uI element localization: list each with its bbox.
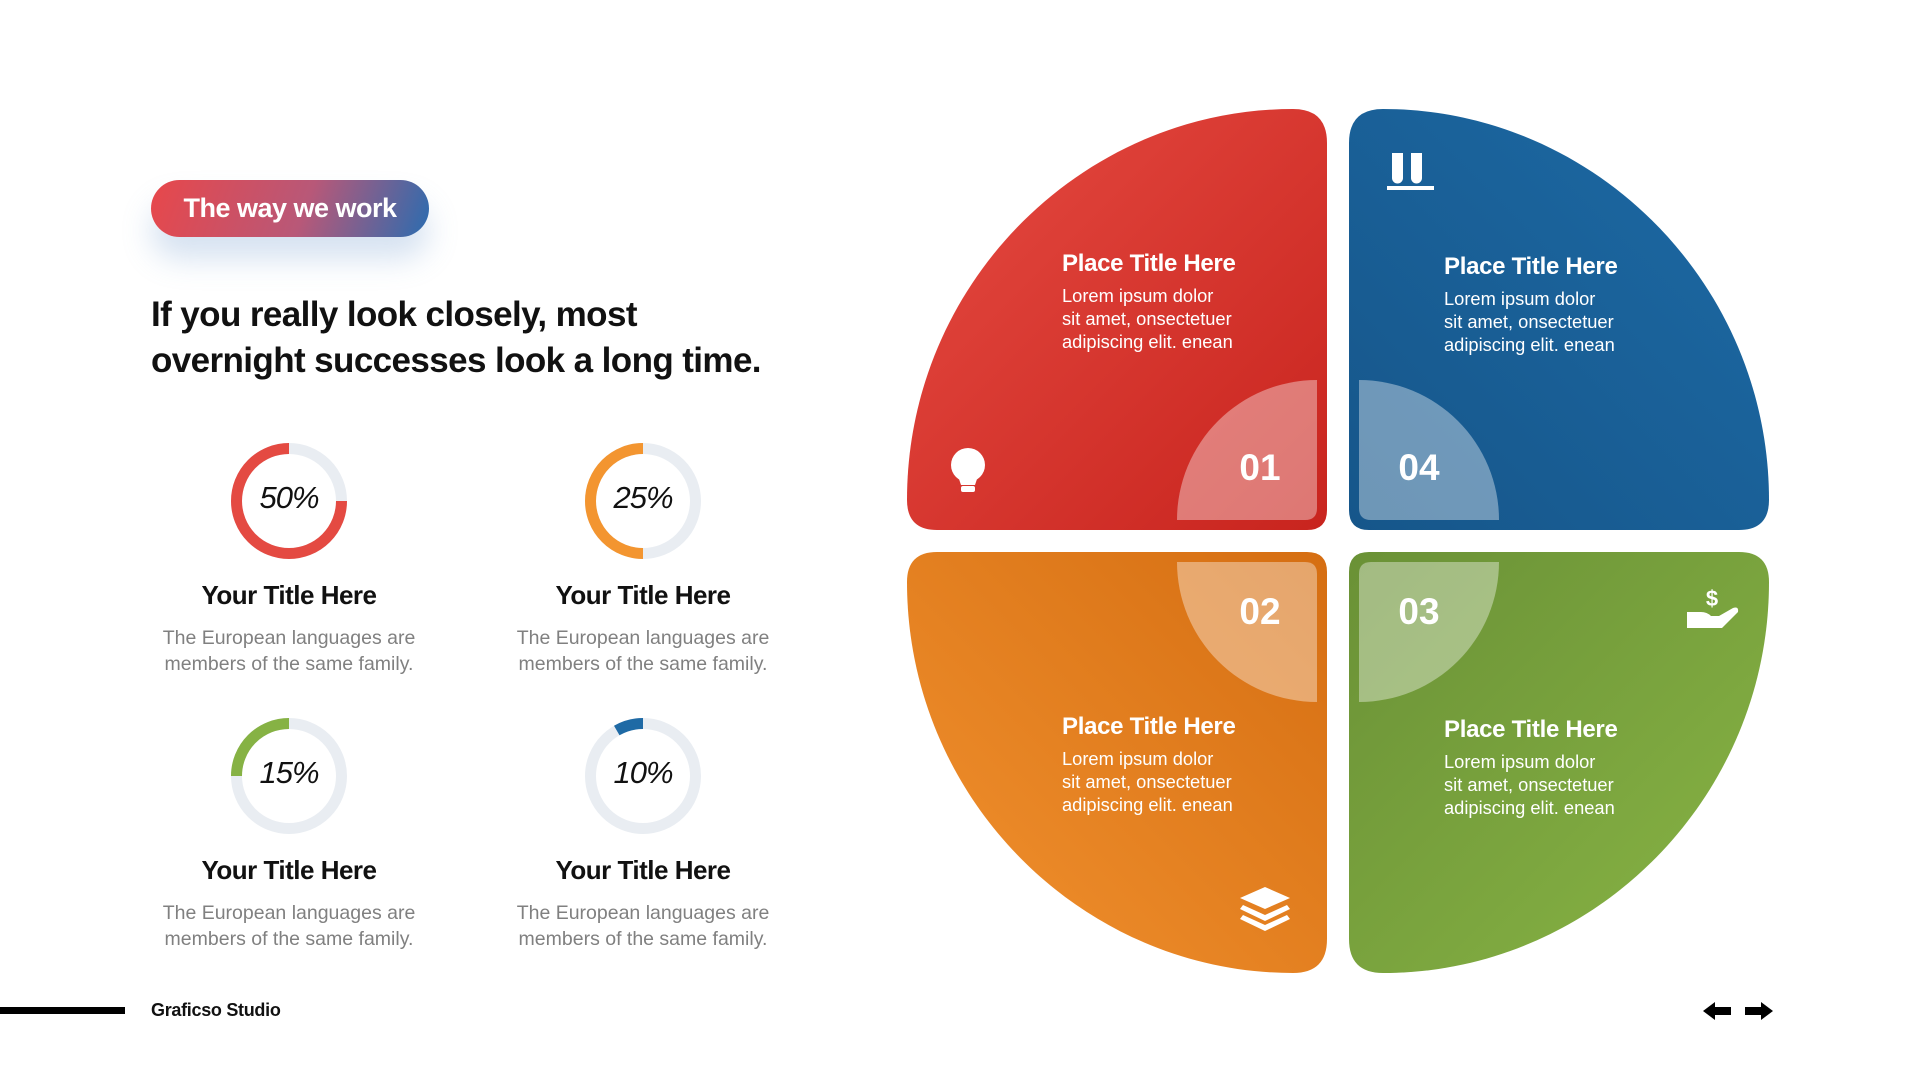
text: quadrant 02: sit amet, onsectetuer: [1062, 771, 1232, 792]
desc: [163, 627, 415, 675]
text: quadrant 02: [1062, 713, 1236, 815]
stat 25%: [517, 443, 769, 675]
quadrant 02 orange: [907, 552, 1327, 973]
text: quadrant 04: sit amet, onsectetuer: [1444, 311, 1614, 332]
text: quadrant 03: Lorem ipsum dolor: [1444, 751, 1595, 772]
text: quadrant 04: Lorem ipsum dolor: [1444, 288, 1595, 309]
number 03: 03: [1398, 591, 1440, 632]
text: quadrant 03: sit amet, onsectetuer: [1444, 774, 1614, 795]
icon: hand with dollar: [1687, 586, 1738, 628]
desc: The European languages are: [163, 627, 415, 649]
tag pill: The way we work: [183, 193, 397, 223]
stat 15%: The European languages are: [163, 902, 415, 924]
text: quadrant 04: adipiscing elit. enean: [1444, 334, 1615, 355]
icon: test tubes: [1387, 153, 1434, 190]
quadrant 01 red: [907, 109, 1327, 530]
ring 50: [231, 443, 347, 559]
quadrant 04 blue: [1349, 109, 1769, 530]
quadrant 03 green: [1349, 552, 1769, 973]
headline: [151, 295, 761, 380]
text: quadrant 02: Lorem ipsum dolor: [1062, 748, 1213, 769]
text: quadrant 03: Place Title Here: [1444, 716, 1618, 743]
stat 50%: 50%: [259, 480, 319, 515]
headline: overnight successes look a long time.: [151, 341, 761, 380]
text: quadrant 01: [1062, 250, 1236, 352]
text: quadrant 03: adipiscing elit. enean: [1444, 797, 1615, 818]
stat 10%: 10%: [613, 755, 673, 790]
nav arrows: [1703, 1002, 1773, 1020]
title: Your Title Here: [201, 580, 377, 610]
stat 10%: [517, 718, 769, 950]
footer bar: [0, 1007, 125, 1014]
stat 50%: [163, 443, 415, 675]
stat 25%: 25%: [613, 480, 673, 515]
stat 10%: The European languages are: [517, 902, 769, 924]
stat 25%: Your Title Here: [555, 580, 731, 610]
stat 10%: members of the same family.: [519, 928, 767, 950]
stat 25%: members of the same family.: [519, 653, 767, 675]
icon: hand with dollar: $: [1706, 586, 1718, 611]
stat 15%: Your Title Here: [201, 855, 377, 885]
text: quadrant 01: sit amet, onsectetuer: [1062, 308, 1232, 329]
number 02: 02: [1239, 591, 1281, 632]
stat 25%: The European languages are: [517, 627, 769, 649]
text: quadrant 03: [1444, 716, 1618, 818]
icon: layers: [1240, 887, 1290, 931]
text: quadrant 02: adipiscing elit. enean: [1062, 794, 1233, 815]
number 04: 04: [1398, 447, 1440, 488]
tag pill: [151, 180, 429, 237]
icon: bulb: [951, 448, 985, 492]
stat 15%: members of the same family.: [165, 928, 413, 950]
text: quadrant 04: Place Title Here: [1444, 253, 1618, 280]
text: quadrant 02: Place Title Here: [1062, 713, 1236, 740]
stat 15%: 15%: [259, 755, 319, 790]
headline: If you really look closely, most: [151, 295, 637, 334]
desc: members of the same family.: [165, 653, 413, 675]
text: quadrant 04: [1444, 253, 1618, 355]
stat 10%: Your Title Here: [555, 855, 731, 885]
number 01: 01: [1239, 447, 1281, 488]
text: quadrant 01: Place Title Here: [1062, 250, 1236, 277]
text: quadrant 01: adipiscing elit. enean: [1062, 331, 1233, 352]
text: quadrant 01: Lorem ipsum dolor: [1062, 285, 1213, 306]
stat 15%: [163, 718, 415, 950]
footer brand: Graficso Studio: [151, 1000, 281, 1020]
